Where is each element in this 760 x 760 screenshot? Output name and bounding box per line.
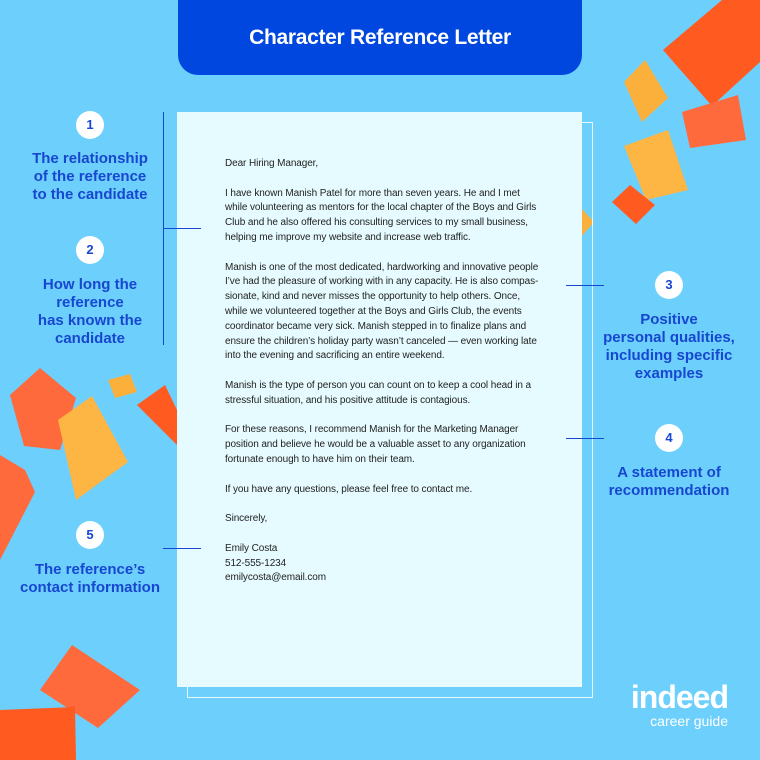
label 5: contact information <box>20 579 160 596</box>
label 4: A statement of <box>617 464 721 481</box>
logo: indeed career guide: career guide <box>650 713 728 729</box>
callout 3 <box>603 271 735 382</box>
header: title: Character Reference Letter <box>249 26 511 49</box>
label 4 <box>609 464 729 499</box>
letter text: emilycosta@email.com <box>225 572 326 583</box>
label 5: The reference’s <box>35 561 145 578</box>
badge 3 <box>655 271 683 299</box>
badge 4: 4 <box>665 430 673 445</box>
badge 2 <box>76 236 104 264</box>
label 3 <box>603 311 735 382</box>
paper outline <box>187 122 593 698</box>
letter text: Dear Hiring Manager, <box>225 158 318 169</box>
logo: indeed career guide: indeed <box>631 679 728 715</box>
label 5 <box>20 561 160 596</box>
label 4: recommendation <box>609 482 729 499</box>
label 3: Positive <box>640 311 698 328</box>
letter text: I have known Manish Patel for more than seven years. He and I met while volunteering as mentors for the local chapter of the Boys and Girls Club and he also offered his consulting services to my small business, helping me improve my website and increase web traffic. <box>225 188 536 243</box>
callout 5 <box>20 521 160 596</box>
letter text: Manish is the type of person you can count on to keep a cool head in a stressful situation, and his positive attitude is contagious. <box>225 380 531 406</box>
letter paper <box>177 112 582 687</box>
label 1 <box>32 150 148 203</box>
label 2: reference <box>56 294 124 311</box>
label 1: The relationship <box>32 150 148 167</box>
label 2 <box>38 276 142 347</box>
label 3: personal qualities, <box>603 329 735 346</box>
letter text <box>225 158 538 583</box>
badge 2: 2 <box>86 242 94 257</box>
label 1: to the candidate <box>32 186 148 203</box>
callout 2 <box>38 236 142 347</box>
letter text: If you have any questions, please feel free to contact me. <box>225 484 472 495</box>
label 1: of the reference <box>34 168 146 185</box>
letter text: sionate, kind and never misses the opportunity to help others. Once, while we volunteered together at the Boys and Girls Club, the events coordinator became very sick. Manish stepped in to finalize plans and ensure the children’s holiday party wasn’t canceled — even working late into the evening and sacrificing an entire weekend. <box>225 291 537 361</box>
badge 5 <box>76 521 104 549</box>
letter text: Manish is one of the most dedicated, hardworking and innovative people I’ve had the pleasure of working with in any capacity. He is also compas- <box>225 262 538 287</box>
letter text: Emily Costa <box>225 543 277 554</box>
badge 1: 1 <box>86 117 94 132</box>
badge 4 <box>655 424 683 452</box>
callout 4 <box>609 424 729 499</box>
letter text: For these reasons, I recommend Manish for the Marketing Manager position and believe he would be a valuable asset to any organization fortunate enough to have him on their team. <box>225 424 526 465</box>
badge 1 <box>76 111 104 139</box>
connector lines <box>163 112 164 345</box>
letter text: Sincerely, <box>225 513 267 524</box>
callout 1 <box>32 111 148 203</box>
label 3: including specific <box>606 347 732 364</box>
label 2: How long the <box>43 276 137 293</box>
label 2: has known the <box>38 312 142 329</box>
letter text: 512-555-1234 <box>225 558 286 569</box>
label 3: examples <box>635 365 703 382</box>
badge 5: 5 <box>86 527 94 542</box>
label 2: candidate <box>55 330 125 347</box>
badge 3: 3 <box>665 277 673 292</box>
header: title <box>178 0 582 75</box>
